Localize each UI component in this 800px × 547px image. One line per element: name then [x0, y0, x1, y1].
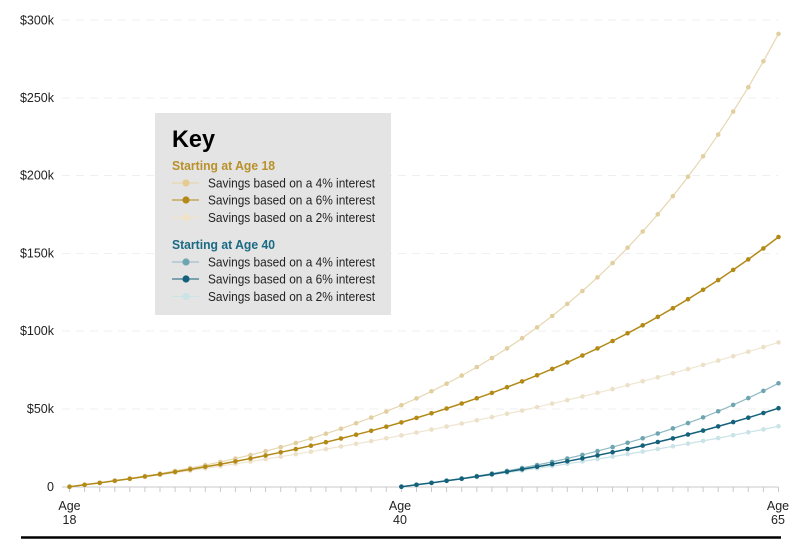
y axis labels: $150k — [20, 246, 55, 260]
x axis labels: 40 — [393, 513, 407, 527]
key row: age 18, 2%: Savings based on a 2% interest — [208, 211, 375, 225]
series: age 18 pale gold line — [70, 342, 778, 487]
series: age 40 medium teal line — [401, 383, 778, 487]
y axis labels: $100k — [20, 324, 55, 338]
key title: Key — [172, 126, 216, 153]
y axis labels: $250k — [20, 91, 55, 105]
x axis with yearly ticks — [62, 487, 778, 492]
key row: age 18, 4%: Savings based on a 4% interest — [208, 176, 375, 190]
x axis labels: Age — [767, 499, 789, 513]
key group heading: age 18: Starting at Age 18 — [172, 159, 275, 173]
key row: age 40, 4%: Savings based on a 4% interest — [208, 256, 375, 270]
series: age 18 light gold line — [70, 34, 778, 487]
y axis labels: $300k — [20, 14, 55, 28]
x axis labels: 65 — [771, 513, 785, 527]
key row: age 40, 6%: Savings based on a 6% interest — [208, 272, 375, 286]
series: age 18 dark gold line — [70, 237, 778, 487]
key row: age 18, 6%: Savings based on a 6% interest — [208, 194, 375, 208]
series: age 40 pale teal line — [401, 426, 778, 487]
x axis labels — [58, 499, 789, 527]
y axis labels: $50k — [27, 402, 55, 416]
key row: age 40, 2%: Savings based on a 2% interest — [208, 290, 375, 304]
key group heading: age 40: Starting at Age 40 — [172, 238, 275, 252]
y axis labels — [20, 14, 55, 494]
y axis labels: 0 — [47, 480, 54, 494]
x axis labels: Age — [389, 499, 411, 513]
x axis labels: 18 — [63, 513, 76, 527]
series: age 40 dark teal line — [401, 408, 778, 487]
y axis labels: $200k — [20, 168, 55, 182]
panel: key — [155, 113, 391, 315]
x axis labels: Age — [58, 499, 81, 513]
